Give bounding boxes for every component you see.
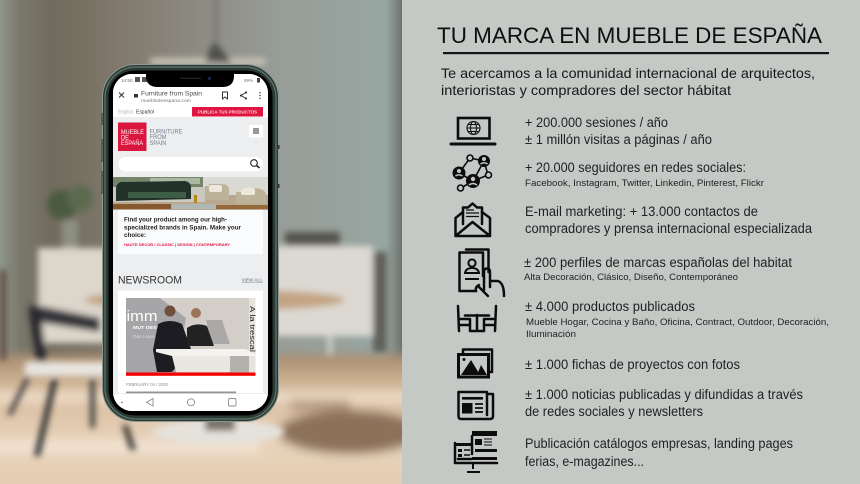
text: e-mail marketing: E-mail marketing: + 13.000 contactos de bbox=[525, 204, 758, 219]
news card with photo: FEBRUARY 04 / 2020 bbox=[126, 382, 169, 387]
icon: laptop with globe bbox=[451, 118, 495, 144]
title underline bbox=[443, 52, 829, 54]
language row and red button: English bbox=[118, 110, 133, 116]
android navigation bar bbox=[113, 394, 268, 412]
status bar bbox=[121, 77, 260, 83]
logo: FURNITURE bbox=[150, 130, 182, 136]
browser toolbar: muebledeespana.com bbox=[141, 98, 191, 103]
text: catalogues and landing pages: Publicación catálogos empresas, landing pages bbox=[525, 436, 793, 451]
text: products: ± 4.000 productos publicados bbox=[525, 299, 695, 314]
logo bbox=[118, 122, 182, 151]
text: news: ± 1.000 noticias publicadas y difundidas a través bbox=[525, 387, 803, 402]
language row and red button: Español bbox=[136, 110, 154, 116]
intro card bbox=[118, 210, 263, 254]
text: products: Mueble Hogar, Cocina y Baño, Oficina, Contract, Outdoor, Decoración, bbox=[526, 317, 829, 328]
text: social followers: Facebook, Instagram, Twitter, Linkedin, Pinterest, Flickr bbox=[525, 178, 765, 189]
right text panel background bbox=[402, 0, 860, 484]
phone notch bbox=[146, 72, 234, 87]
news card with photo: A la trescal bbox=[248, 306, 255, 353]
text: news bbox=[525, 387, 803, 419]
text: web sessions: ± 1 millón visitas a páginas / año bbox=[525, 132, 712, 147]
icon: stacked pictures bbox=[458, 350, 492, 377]
news card with photo: MUT DESIGN bbox=[133, 325, 167, 331]
menu button bbox=[249, 125, 263, 138]
search box bbox=[118, 157, 263, 172]
text: catalogues and landing pages: ferias, e-magazines... bbox=[525, 454, 644, 469]
news card with photo: Das Haus 2020 bbox=[133, 334, 168, 339]
intro card: specialized brands in Spain. Make your bbox=[124, 224, 242, 232]
text: social followers bbox=[525, 160, 765, 189]
text: news: de redes sociales y newsletters bbox=[525, 404, 703, 419]
icon: table and chairs bbox=[458, 306, 496, 331]
text: web sessions: + 200.000 sesiones / año bbox=[525, 115, 668, 130]
browser toolbar: Furniture from Spain bbox=[141, 90, 202, 98]
intro card: choice: bbox=[124, 232, 146, 239]
status bar: 14:50 bbox=[121, 78, 133, 83]
smartphone mockup bbox=[101, 64, 280, 422]
logo: DE bbox=[121, 134, 130, 142]
icon: e-mail envelope bbox=[456, 204, 490, 236]
intro text: Te acercamos a la comunidad internacional de arquitectos, bbox=[441, 65, 815, 81]
text: social followers: + 20.000 seguidores en redes sociales: bbox=[525, 160, 746, 175]
newsroom heading: VIEW ALL bbox=[242, 278, 263, 282]
newsroom heading: NEWSROOM bbox=[118, 274, 182, 286]
intro card: Find your product among our high- bbox=[124, 216, 227, 224]
intro text: interioristas y compradores del sector hábitat bbox=[441, 82, 731, 98]
newsroom heading bbox=[118, 276, 263, 284]
text: projects: ± 1.000 fichas de proyectos con fotos bbox=[525, 357, 740, 372]
language row and red button bbox=[118, 107, 263, 116]
icon: newspaper bbox=[458, 392, 493, 419]
phone screen: web page bbox=[113, 74, 268, 412]
text: products: Iluminación bbox=[526, 329, 576, 340]
text: brand profiles: Alta Decoración, Clásico, Diseño, Contemporáneo bbox=[524, 272, 738, 283]
logo: MUEBLE bbox=[121, 129, 145, 136]
text: brand profiles bbox=[524, 255, 792, 283]
news card with photo: imm bbox=[126, 308, 158, 325]
news card with photo bbox=[118, 290, 263, 400]
status bar: 89% bbox=[244, 78, 253, 83]
text: catalogues and landing pages bbox=[525, 436, 793, 469]
intro text bbox=[441, 65, 815, 98]
text: e-mail marketing: compradores y prensa internacional especializada bbox=[525, 221, 812, 236]
logo: FROM bbox=[150, 135, 166, 141]
icon: profile with pointing hand bbox=[460, 250, 504, 296]
intro card: HAUTE DECOR / CLASSIC | DESIGN | CONTEMPORARY bbox=[124, 243, 231, 247]
logo: SPAIN bbox=[150, 141, 166, 147]
logo: ESPAÑA bbox=[121, 138, 144, 147]
banner photo: sofas bbox=[113, 177, 268, 210]
browser toolbar bbox=[119, 90, 261, 103]
text: products bbox=[525, 299, 829, 340]
icon: social network bbox=[452, 155, 492, 191]
icon: web pages on monitor bbox=[455, 431, 497, 472]
blurred interior photo background bbox=[0, 0, 422, 484]
text: e-mail marketing bbox=[525, 204, 812, 236]
text: web sessions bbox=[525, 115, 712, 147]
language row and red button: PUBLICA TUS PRODUCTOS bbox=[198, 110, 258, 116]
title: TU MARCA EN MUEBLE DE ESPAÑA bbox=[437, 23, 822, 48]
text: brand profiles: ± 200 perfiles de marcas españolas del habitat bbox=[524, 255, 792, 270]
